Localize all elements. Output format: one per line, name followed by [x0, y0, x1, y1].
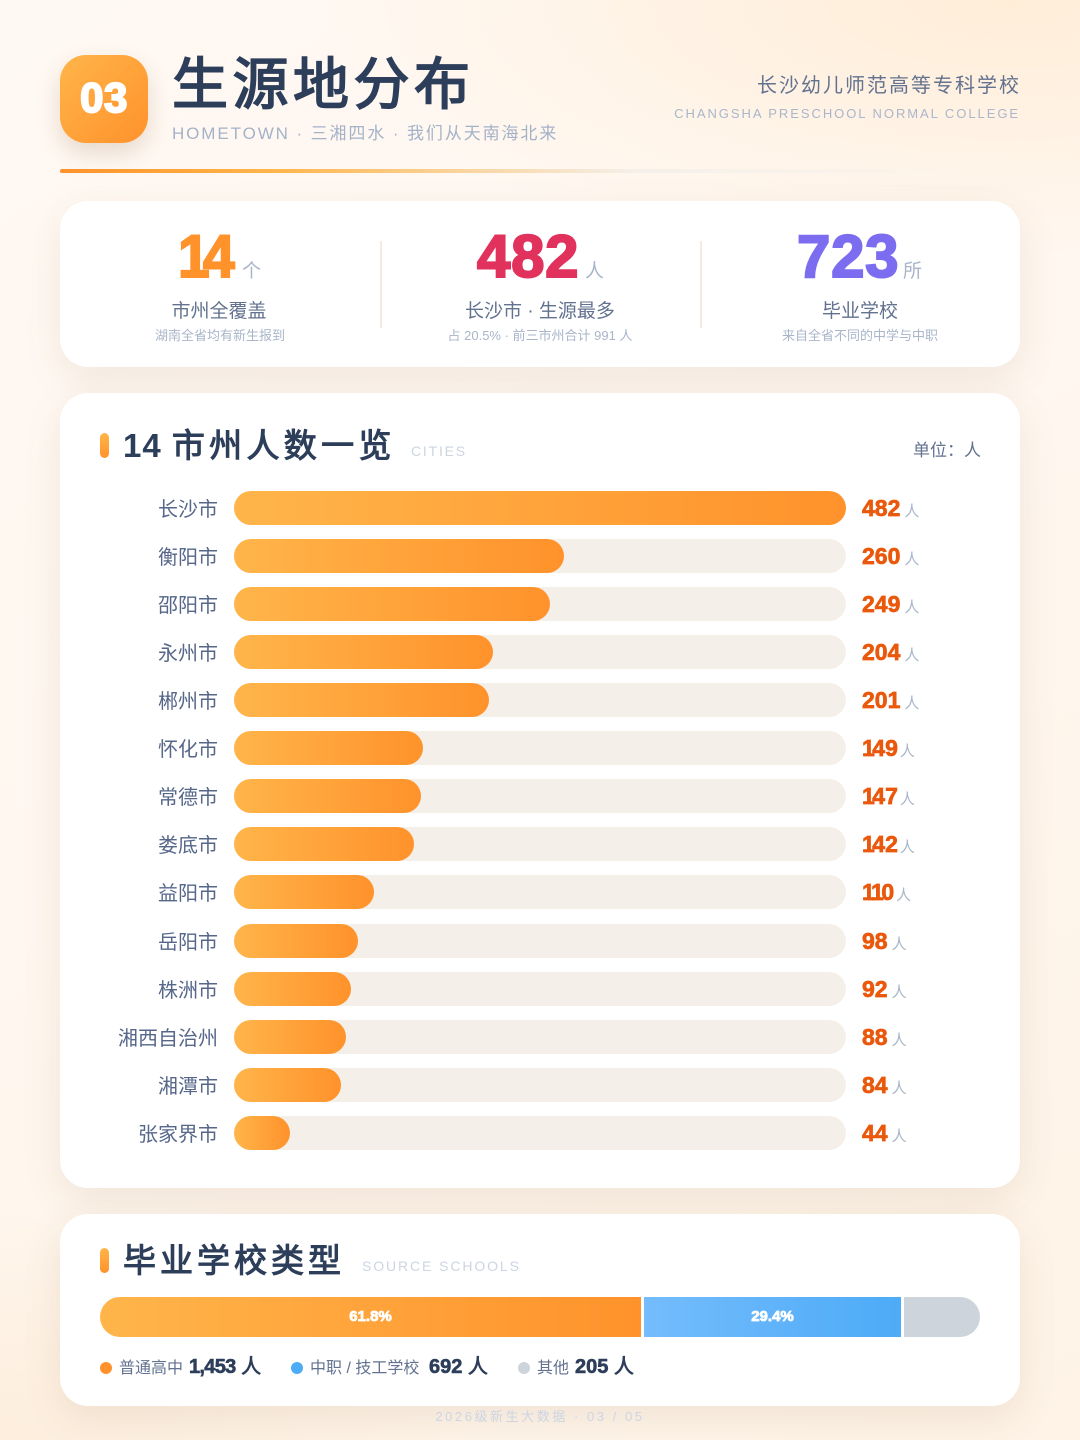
heading accent — [100, 433, 109, 458]
row: 娄底市: 142人 — [862, 831, 915, 857]
row: 长沙市 — [158, 491, 919, 525]
stat label: 市州全覆盖 — [171, 301, 266, 322]
heading english tag: SOURCE SCHOOLS — [362, 1258, 521, 1274]
row: 衡阳市: 衡阳市 — [158, 547, 218, 569]
row: 常德市: 常德市 — [158, 787, 218, 809]
heading accent — [100, 1248, 109, 1273]
heading: 14 市州人数一览 — [123, 427, 396, 464]
row: 长沙市: 482 人 — [862, 495, 919, 521]
stacked bar — [100, 1297, 980, 1337]
legend: vocational: 中职 / 技工学校 — [310, 1360, 419, 1377]
row: 永州市: 204 人 — [862, 639, 919, 665]
row: 益阳市 — [158, 875, 911, 909]
legend: other: 其他 — [537, 1360, 569, 1377]
row: 邵阳市 — [158, 587, 919, 621]
row: 张家界市 — [138, 1116, 907, 1150]
row: 益阳市: 110人 — [862, 879, 911, 905]
segment: high school 61.8%: 61.8% — [349, 1308, 392, 1325]
row: 株洲市: 92 人 — [862, 976, 907, 1002]
row: 娄底市 — [158, 827, 915, 861]
row: 衡阳市: 260 人 — [862, 543, 919, 569]
big number 723: 723 — [797, 223, 899, 290]
row: 永州市: 永州市 — [158, 643, 218, 665]
panel: school types — [60, 1214, 1020, 1406]
legend: high school: 普通高中 — [119, 1360, 183, 1377]
row: 永州市 — [158, 635, 919, 669]
stat label: 毕业学校 — [822, 301, 898, 322]
stat note: 来自全省不同的中学与中职 — [782, 328, 938, 343]
row: 郴州市 — [158, 683, 919, 717]
row: 长沙市: 长沙市 — [158, 499, 218, 521]
legend: other — [518, 1356, 634, 1378]
heading english tag: CITIES — [411, 443, 467, 459]
legend: high school — [100, 1356, 261, 1378]
panel: key stats — [60, 201, 1020, 367]
number badge: 03 — [80, 74, 128, 121]
footer: 2026级新生大数据 · 03 / 05 — [435, 1409, 645, 1424]
header rule — [60, 169, 1020, 173]
row: 常德市 — [158, 779, 915, 813]
big number 482: 482 — [477, 223, 579, 290]
segment: vocational 29.4%: 29.4% — [751, 1308, 794, 1325]
panel: city ranking — [60, 393, 1020, 1188]
row: 怀化市: 149人 — [862, 735, 915, 761]
subtitle: HOMETOWN · 三湘四水 · 我们从天南海北来 — [172, 124, 558, 143]
stat: schools — [782, 223, 938, 343]
row: 湘西自治州 — [118, 1020, 907, 1054]
header — [50, 53, 1021, 173]
row: 株洲市: 株洲市 — [158, 980, 218, 1002]
row: 株洲市 — [158, 972, 907, 1006]
row: 邵阳市: 邵阳市 — [158, 595, 218, 617]
stat: cities covered — [155, 223, 285, 343]
row: 益阳市: 益阳市 — [158, 883, 218, 905]
row: 怀化市: 怀化市 — [158, 739, 218, 761]
number badge — [60, 55, 148, 143]
bar chart — [118, 491, 919, 1150]
row: 湘潭市 — [158, 1068, 907, 1102]
school english name: CHANGSHA PRESCHOOL NORMAL COLLEGE — [674, 106, 1020, 121]
row: 湘西自治州: 88 人 — [862, 1024, 907, 1050]
unit: 所 — [903, 261, 922, 282]
unit: 人 — [585, 261, 604, 282]
row: 岳阳市 — [158, 924, 907, 958]
school name: 长沙幼儿师范高等专科学校 — [757, 75, 1021, 97]
stat label: 长沙市 · 生源最多 — [465, 301, 615, 322]
heading: 毕业学校类型 — [123, 1242, 345, 1279]
segment: vocational 29.4% — [644, 1297, 901, 1337]
row: 湘西自治州: 湘西自治州 — [118, 1028, 218, 1050]
row: 岳阳市: 岳阳市 — [158, 932, 218, 954]
legend: high school: 1,453 人 — [189, 1356, 261, 1378]
row: 郴州市: 郴州市 — [158, 691, 218, 713]
row: 湘潭市: 湘潭市 — [158, 1076, 218, 1098]
unit note: 单位：人 — [913, 441, 981, 460]
segment: high school 61.8% — [100, 1297, 641, 1337]
row: 怀化市 — [158, 731, 915, 765]
row: 衡阳市 — [158, 539, 919, 573]
big number 14: 14 — [178, 223, 228, 290]
row: 郴州市: 201 人 — [862, 687, 919, 713]
row: 邵阳市: 249 人 — [862, 591, 919, 617]
legend: other: 205 人 — [575, 1356, 634, 1378]
unit: 个 — [242, 261, 261, 282]
title: 生源地分布 — [172, 53, 474, 116]
stat note: 湖南全省均有新生报到 — [155, 328, 285, 343]
segment: other — [904, 1297, 980, 1337]
row: 娄底市: 娄底市 — [158, 835, 218, 857]
row: 张家界市: 44 人 — [862, 1120, 907, 1146]
stat note: 占 20.5% · 前三市州合计 991 人 — [448, 328, 632, 343]
row: 张家界市: 张家界市 — [138, 1124, 218, 1146]
row: 岳阳市: 98 人 — [862, 928, 907, 954]
legend: vocational: 692 人 — [429, 1356, 488, 1378]
row: 湘潭市: 84 人 — [862, 1072, 907, 1098]
row: 常德市: 147人 — [862, 783, 915, 809]
stat: Changsha — [448, 223, 632, 343]
legend: vocational — [291, 1356, 488, 1378]
